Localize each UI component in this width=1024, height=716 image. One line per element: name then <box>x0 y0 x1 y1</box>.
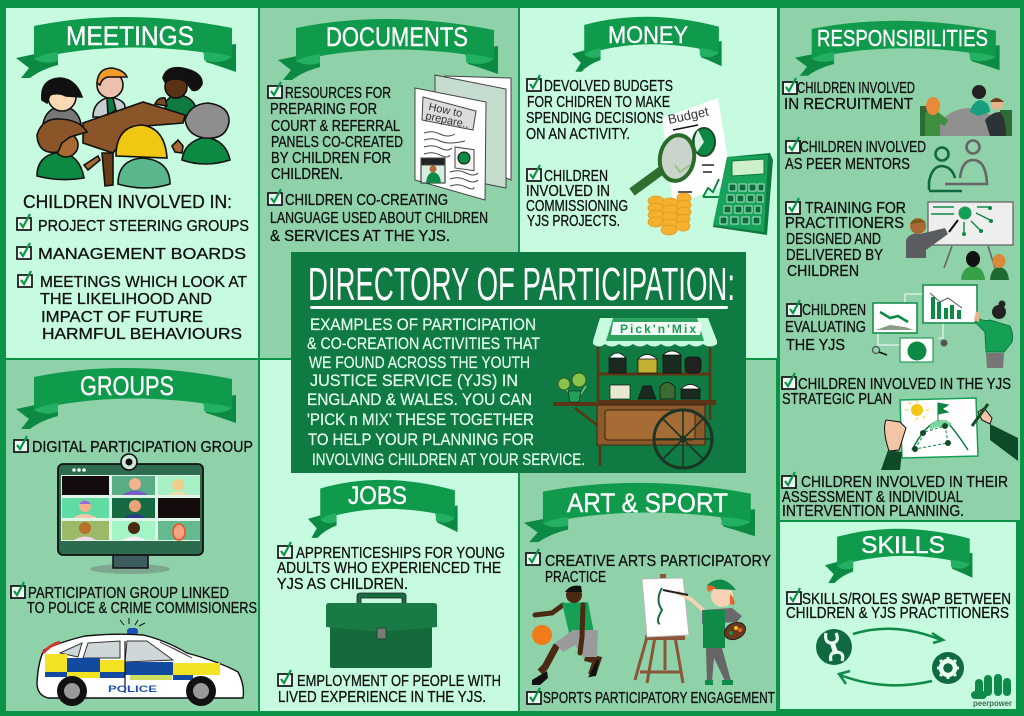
icon: peer mentors <box>929 140 987 191</box>
item: devolved budgets: FOR CHIDREN TO MAKE <box>527 94 670 111</box>
item: training for practitioners <box>785 198 906 280</box>
item: peer mentors: CHILDREN INVOLVED <box>800 139 926 156</box>
heading: documents: DOCUMENTS <box>326 22 468 52</box>
item: commissioning projects: COMMISSIONING <box>526 198 628 215</box>
item: creative arts: PRACTICE <box>545 569 606 586</box>
item: resources co-created <box>268 82 403 183</box>
item: training for practitioners: CHILDREN <box>787 263 859 280</box>
heading: jobs <box>308 480 458 538</box>
item: project steering groups <box>17 214 249 235</box>
item: peer mentors: AS PEER MENTORS <box>785 156 910 173</box>
heading: jobs: JOBS <box>348 482 407 510</box>
item: skills swap <box>786 588 1011 622</box>
panel: meetings <box>6 8 258 358</box>
illustration: briefcase <box>326 593 437 668</box>
item: apprenticeships <box>277 542 505 593</box>
item: management boards: MANAGEMENT BOARDS <box>38 246 246 263</box>
heading: art and sport <box>524 483 755 542</box>
item: commissioning projects: INVOLVED IN <box>526 183 610 200</box>
heading: responsibilities <box>795 21 1000 76</box>
panel: skills <box>780 522 1016 709</box>
item: digital participation group: DIGITAL PARTICIPATION GROUP <box>32 439 253 456</box>
item: children co-creating language: CHILDREN CO-CREATING <box>285 192 448 209</box>
item: devolved budgets: SPENDING DECISIONS <box>526 110 664 127</box>
icon: gear <box>932 652 964 684</box>
heading: groups: GROUPS <box>80 371 174 401</box>
item: meetings likelihood and impact: IMPACT OF FUTURE <box>41 309 203 326</box>
item: police and crime commissioners group: PARTICIPATION GROUP LINKED <box>28 585 229 602</box>
heading: money <box>572 17 722 72</box>
item: recruitment <box>783 78 915 113</box>
item: employment lived experience: LIVED EXPERIENCE IN THE YJS. <box>278 689 486 706</box>
illustration: strategic plan map <box>881 398 1018 470</box>
panel: jobs <box>260 360 518 711</box>
item: employment lived experience <box>278 670 501 706</box>
item: meetings likelihood and impact <box>18 271 248 343</box>
heading: meetings <box>16 17 236 78</box>
item: training for practitioners: DELIVERED BY <box>786 247 883 264</box>
illustration: booklet: How to <box>427 101 463 120</box>
illustration: booklet <box>415 75 511 200</box>
illustration: video call monitor <box>58 454 203 574</box>
item: recruitment: CHILDREN INVOLVED <box>797 80 915 97</box>
arrow: top <box>853 629 943 643</box>
item: meetings likelihood and impact: MEETINGS WHICH LOOK AT <box>40 274 248 291</box>
heading: money: MONEY <box>608 22 688 49</box>
item: sports engagement <box>527 688 775 707</box>
item: evaluating the yjs: EVALUATING <box>785 319 866 336</box>
text: introduction: & CO-CREATION ACTIVITIES THAT <box>307 335 540 353</box>
illustration: training presentation <box>906 202 1013 280</box>
panel: groups <box>6 360 258 711</box>
item: assessment and intervention planning: ASSESSMENT & INDIVIDUAL <box>782 489 963 506</box>
item: commissioning projects <box>526 165 628 230</box>
item: evaluating the yjs: CHILDREN <box>802 302 866 319</box>
item: devolved budgets: DEVOLVED BUDGETS <box>544 78 673 95</box>
panel: money <box>520 8 777 358</box>
heading: art and sport: ART & SPORT <box>567 488 728 518</box>
item: apprenticeships: APPRENTICESHIPS FOR YOUNG <box>296 545 505 562</box>
item: peer mentors <box>785 137 926 173</box>
heading: documents <box>278 19 498 80</box>
panel: documents <box>260 8 518 358</box>
item: resources co-created: PREPARING FOR <box>270 101 377 118</box>
illustration: police car: POLICE <box>108 684 157 694</box>
text: introduction: WE FOUND ACROSS THE YOUTH <box>309 354 530 372</box>
logo: peerpower: peerpower <box>973 699 1012 708</box>
text: children involved in: CHILDREN INVOLVED IN: <box>23 192 232 212</box>
illustration: budget, magnifier, coins and calculator <box>632 98 773 235</box>
item: resources co-created: CHILDREN. <box>271 166 343 183</box>
illustration: painter at easel <box>635 574 748 685</box>
arrow: bottom <box>839 671 932 685</box>
item: strategic plan: STRATEGIC PLAN <box>782 391 892 408</box>
text: introduction: 'PICK n MIX' THESE TOGETHER <box>307 411 534 429</box>
item: children co-creating language: & SERVICES AT THE YJS. <box>270 228 450 245</box>
item: police and crime commissioners group <box>11 582 257 617</box>
item: devolved budgets: ON AN ACTIVITY. <box>526 126 630 143</box>
illustration: meeting table <box>37 68 230 188</box>
item: assessment and intervention planning <box>782 472 1008 520</box>
item: evaluating the yjs: THE YJS <box>786 337 845 354</box>
item: management boards <box>17 243 246 263</box>
illustration: basketball player <box>532 586 598 685</box>
heading: groups <box>16 368 236 429</box>
item: resources co-created: RESOURCES FOR <box>285 85 391 102</box>
item: devolved budgets <box>526 75 673 143</box>
logo: peerpower <box>971 674 1012 708</box>
item: training for practitioners: PRACTITIONERS <box>785 215 904 232</box>
illustration: booklet: prepare.. <box>424 110 470 131</box>
item: apprenticeships: YJS AS CHILDREN. <box>277 576 408 593</box>
heading: meetings: MEETINGS <box>66 21 194 51</box>
item: children co-creating language: LANGUAGE USED ABOUT CHILDREN <box>270 210 488 227</box>
panel: directory of participation <box>291 252 746 473</box>
item: creative arts: CREATIVE ARTS PARTICIPATORY <box>545 553 771 570</box>
heading: skills: SKILLS <box>861 532 945 559</box>
illustration: police car <box>37 618 243 706</box>
item: training for practitioners: TRAINING FOR <box>805 200 906 217</box>
item: resources co-created: PANELS CO-CREATED <box>271 134 403 151</box>
illustration: budget, magnifier, coins and calculator: Budget <box>667 104 710 127</box>
text: introduction <box>307 316 585 469</box>
text: introduction: INVOLVING CHILDREN AT YOUR SERVICE. <box>312 451 585 469</box>
item: assessment and intervention planning: INTERVENTION PLANNING. <box>782 503 964 520</box>
illustration: pick n mix cart <box>553 318 717 468</box>
item: recruitment: IN RECRUITMENT <box>784 96 914 113</box>
item: resources co-created: BY CHILDREN FOR <box>271 150 391 167</box>
illustration: evaluation charts <box>872 285 1013 368</box>
item: children co-creating language <box>268 189 488 245</box>
item: resources co-created: COURT & REFERRAL <box>271 118 400 135</box>
item: strategic plan <box>782 373 1011 408</box>
item: evaluating the yjs <box>785 300 866 354</box>
icon: wrench <box>816 629 852 665</box>
panel: responsibilities <box>780 8 1020 520</box>
title: DIRECTORY OF PARTICIPATION: <box>308 258 735 310</box>
illustration: recruitment panel <box>920 85 1012 136</box>
item: training for practitioners: DESIGNED AND <box>786 231 881 248</box>
item: project steering groups: PROJECT STEERING GROUPS <box>38 218 249 235</box>
item: apprenticeships: ADULTS WHO EXPERIENCED THE <box>277 560 501 577</box>
heading: skills <box>825 529 972 583</box>
item: commissioning projects: YJS PROJECTS. <box>527 213 620 230</box>
text: introduction: EXAMPLES OF PARTICIPATION <box>310 316 536 334</box>
text: introduction: TO HELP YOUR PLANNING FOR <box>308 431 534 449</box>
item: meetings likelihood and impact: HARMFUL BEHAVIOURS <box>42 326 242 343</box>
text: introduction: ENGLAND & WALES. YOU CAN <box>307 391 532 409</box>
item: sports engagement: SPORTS PARTICIPATORY ENGAGEMENT <box>543 690 775 707</box>
heading: responsibilities: RESPONSIBILITIES <box>817 25 988 51</box>
illustration: pick n mix cart: Pick'n'Mix <box>620 322 696 336</box>
item: commissioning projects: CHILDREN <box>544 168 608 185</box>
item: police and crime commissioners group: TO POLICE & CRIME COMMISIONERS <box>27 600 257 617</box>
item: creative arts <box>526 549 771 586</box>
item: employment lived experience: EMPLOYMENT OF PEOPLE WITH <box>297 673 501 690</box>
item: meetings likelihood and impact: THE LIKELIHOOD AND <box>40 291 212 308</box>
text: introduction: JUSTICE SERVICE (YJS) IN <box>310 372 518 390</box>
panel: art and sport <box>520 360 776 711</box>
